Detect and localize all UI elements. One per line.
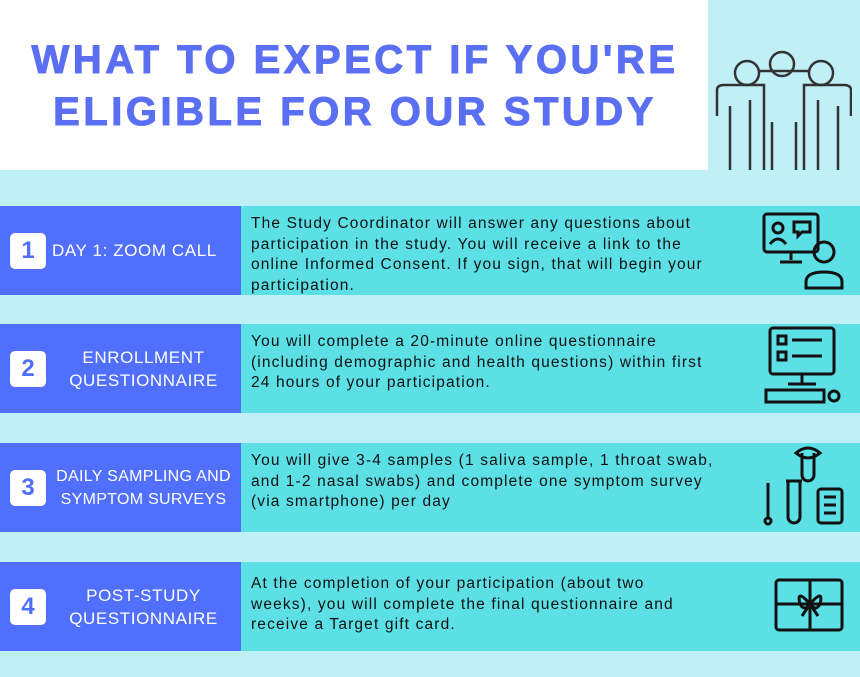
title: ELIGIBLE FOR OUR STUDY <box>53 90 657 134</box>
title <box>30 38 678 134</box>
step 2: 2 <box>21 355 35 382</box>
step 4: POST-STUDY <box>86 586 201 604</box>
step 2: You will complete a 20-minute online questionnaire <box>251 333 657 350</box>
step 1: 1 <box>21 237 35 264</box>
step 3: You will give 3-4 samples (1 saliva sample, 1 throat swab, <box>251 452 713 469</box>
step 1: DAY 1: ZOOM CALL <box>52 241 217 260</box>
step 2: 24 hours of your participation. <box>251 374 491 391</box>
step 3: 3 <box>21 474 35 501</box>
step 4: 4 <box>21 593 35 620</box>
header white area <box>0 0 708 170</box>
icon: computer checklist <box>764 326 840 404</box>
step 2 <box>0 324 860 413</box>
icon: samples <box>764 446 844 526</box>
step 4: weeks), you will complete the final questionnaire and <box>251 596 674 612</box>
step 3: and 1-2 nasal swabs) and complete one symptom survey <box>251 472 703 490</box>
step 4 <box>0 562 860 651</box>
step 4: QUESTIONNAIRE <box>69 608 218 628</box>
step 2: (including demographic and health questions) within first <box>251 354 703 370</box>
step 1: online Informed Consent. If you sign, that will begin your <box>251 256 703 273</box>
step 3: (via smartphone) per day <box>251 493 451 510</box>
step 4: At the completion of your participation (about two <box>251 575 645 592</box>
icon: video call <box>762 212 844 290</box>
step 3: SYMPTOM SURVEYS <box>61 490 226 508</box>
step 1: The Study Coordinator will answer any questions about <box>251 215 691 232</box>
step 3 <box>0 443 860 532</box>
icon: group of people <box>716 50 852 170</box>
step 4: receive a Target gift card. <box>251 616 456 633</box>
step 1: participation. <box>251 276 355 294</box>
step 1 <box>0 206 860 295</box>
step 2: QUESTIONNAIRE <box>69 370 218 390</box>
step 1: participation in the study. You will receive a link to the <box>251 236 682 252</box>
step 2: ENROLLMENT <box>82 348 205 366</box>
icon: gift card <box>774 578 844 632</box>
title: WHAT TO EXPECT IF YOU'RE <box>32 38 678 82</box>
step 3: DAILY SAMPLING AND <box>56 468 231 484</box>
